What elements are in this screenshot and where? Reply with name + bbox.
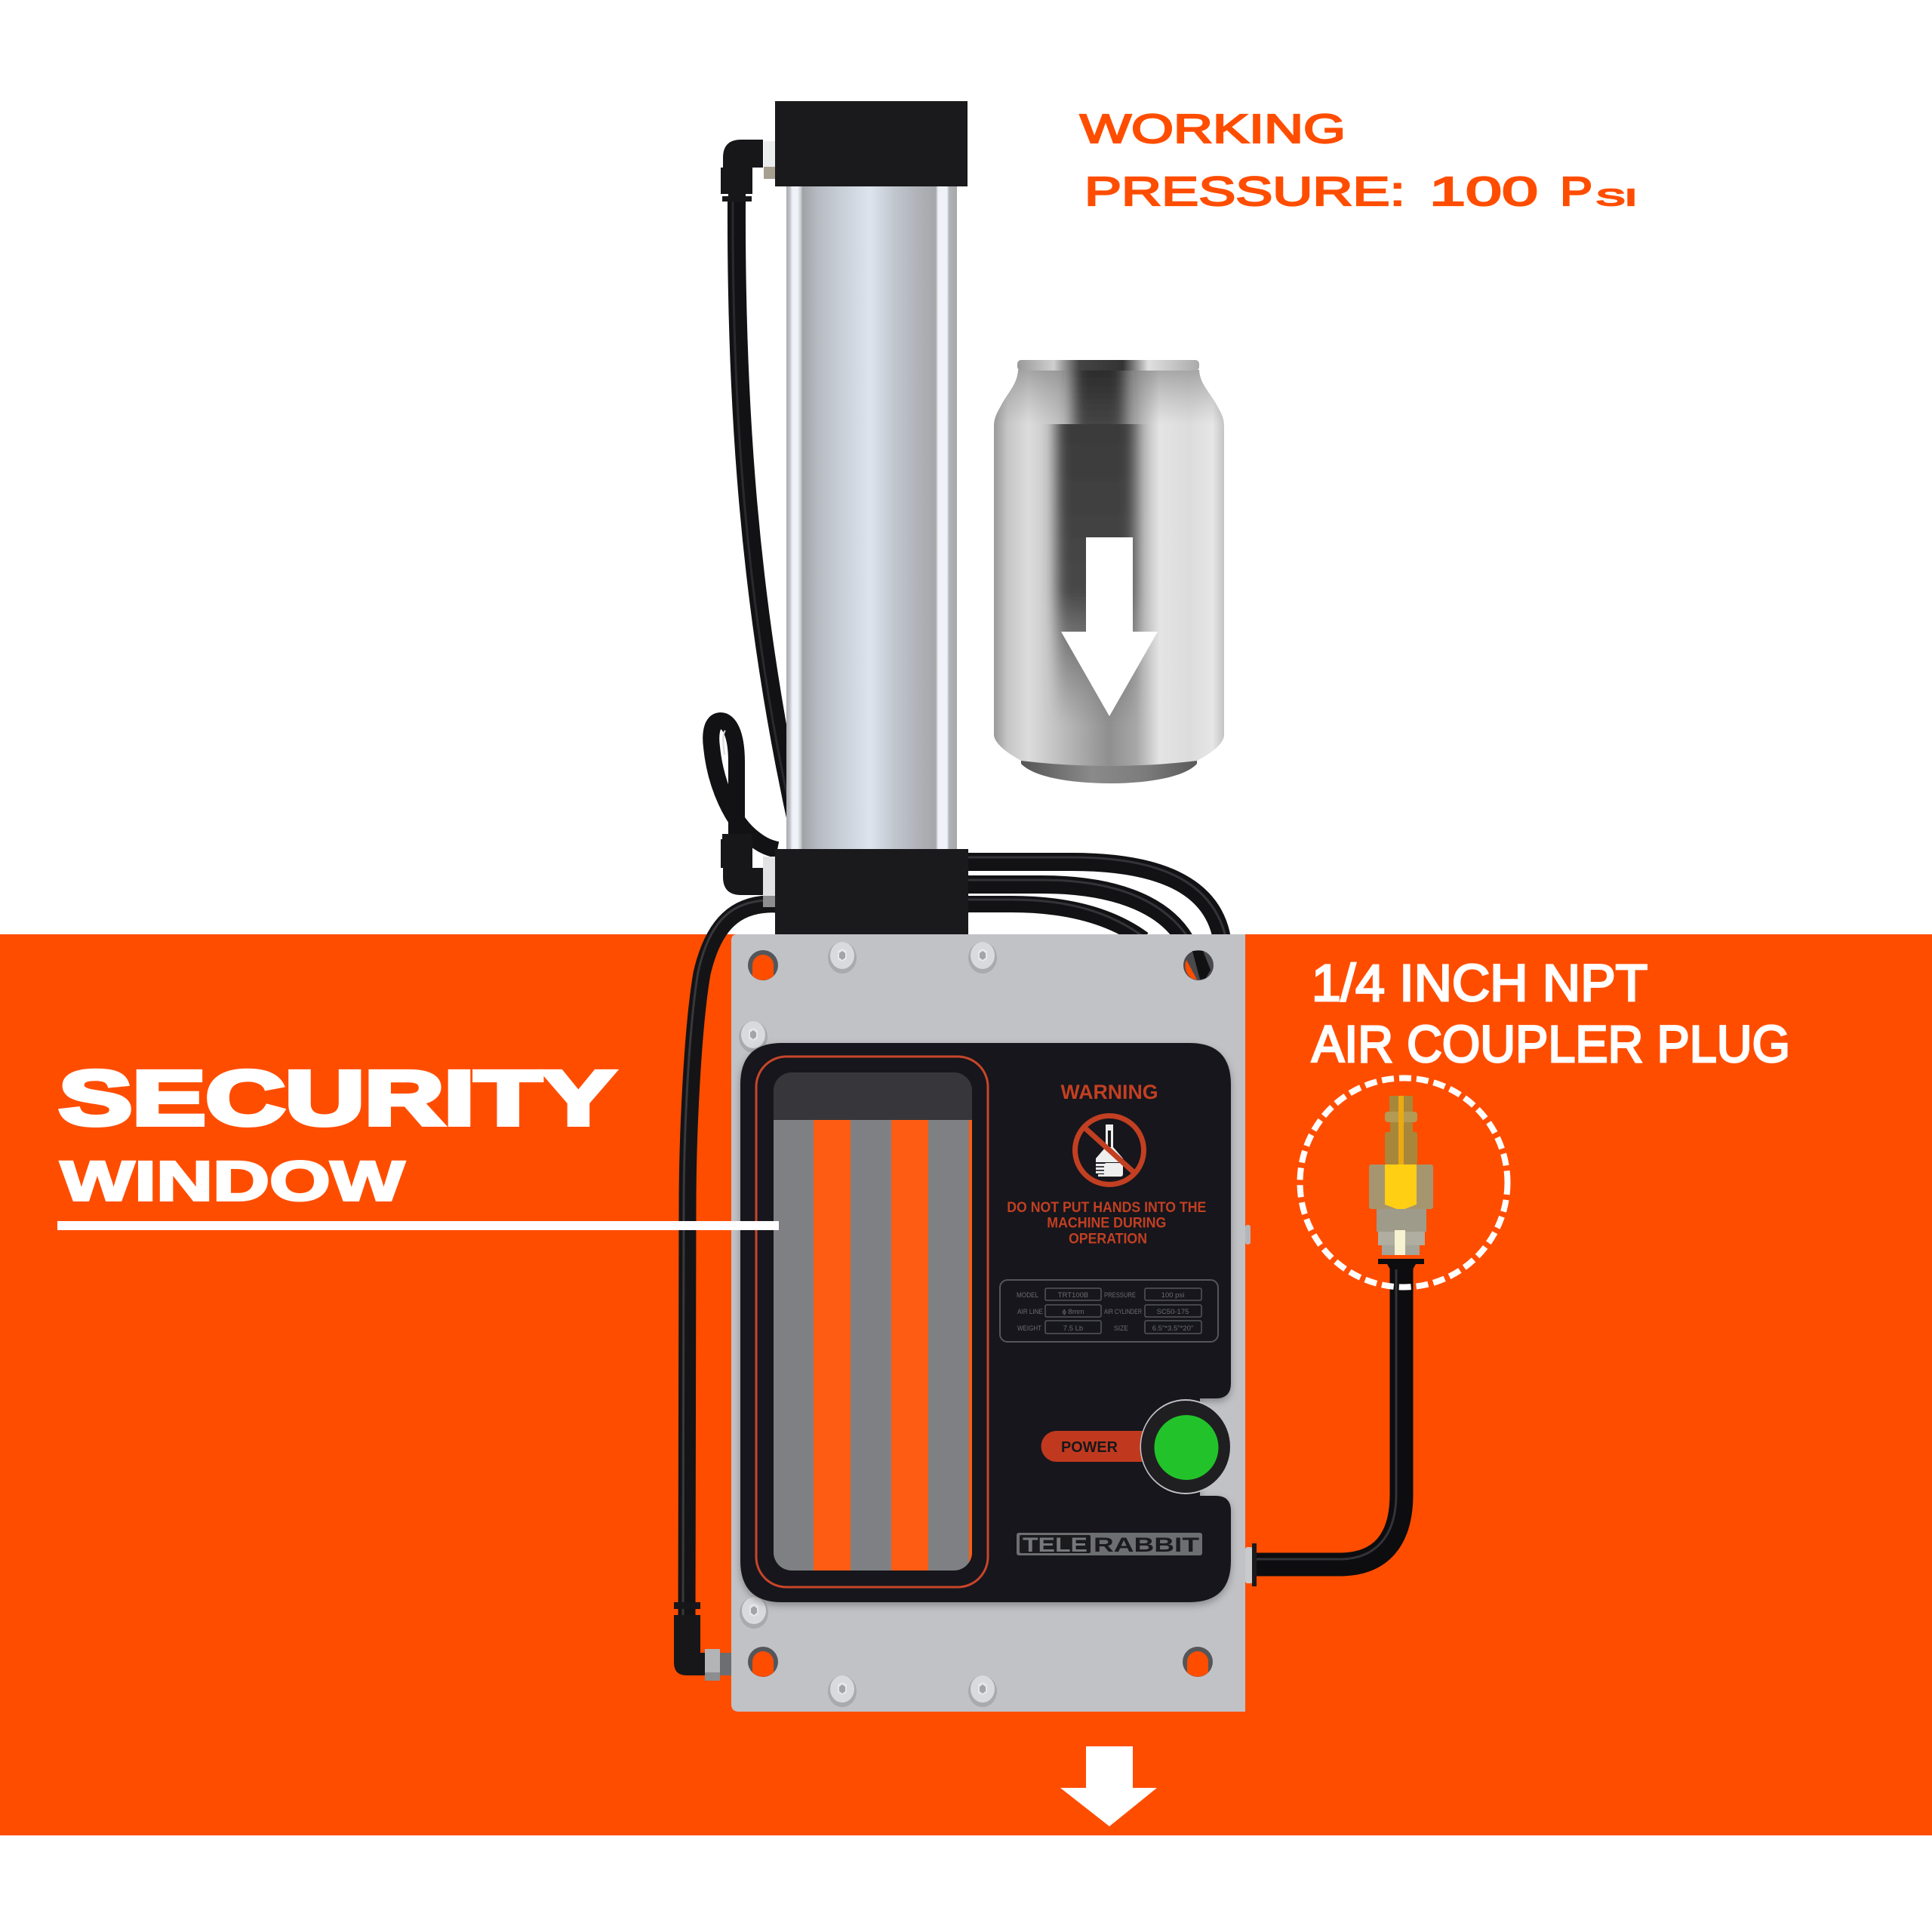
mounting plate [731,934,1245,1712]
working pressure text: WORKING [1080,106,1346,152]
security window heading: SECURITY [59,1055,615,1141]
power button [1140,1399,1232,1494]
pointer line [57,1221,779,1230]
mounting bolts [739,942,997,1707]
aluminium can [994,360,1224,783]
red window frame [756,1057,988,1587]
warning text: OPERATION [1069,1230,1147,1247]
specification table: SC50-175 [1157,1308,1189,1316]
coupler hose [1253,1260,1401,1564]
specification table: 6.5"*3.5"*20" [1152,1324,1193,1333]
specification table [1000,1280,1218,1342]
lower elbow fitting [721,834,775,907]
air cylinder tube [786,186,957,849]
bottom arrow [1060,1746,1157,1826]
working pressure text: 100 [1429,169,1538,214]
TeleRabbit logo: TELE [1023,1534,1088,1556]
specification table: 100 psi [1161,1291,1184,1300]
specification table: TRT100B [1058,1291,1088,1300]
specification table: AIR LINE [1017,1308,1043,1316]
specification table: SIZE [1114,1324,1128,1333]
working pressure text: P [1560,169,1592,214]
TeleRabbit logo [1017,1533,1202,1556]
specification table: 7.5 Lb [1063,1324,1083,1333]
security window heading: WINDOW [60,1150,405,1212]
coupler label: 1/4 INCH NPT [1312,954,1647,1012]
coupler label: AIR COUPLER PLUG [1312,1015,1790,1073]
cylinder top block [775,101,968,186]
long left hose [683,900,777,1619]
security window heading [59,1055,615,1212]
arrow on can [1061,537,1158,716]
cylinder bottom block [775,849,968,934]
side screw [1245,1225,1251,1244]
warning text: MACHINE DURING [1047,1215,1166,1232]
mounting holes [748,950,1214,1677]
working pressure text: SI [1596,184,1637,211]
top hoses [711,200,1227,943]
lower left elbow fitting [674,1602,731,1681]
security window [774,1072,972,1573]
TeleRabbit logo: RABBIT [1094,1534,1200,1556]
air coupler plug [1369,1096,1433,1269]
specification table: WEIGHT [1017,1324,1041,1333]
upper elbow fitting [721,140,775,202]
specification table: PRESSURE [1104,1291,1136,1300]
working pressure text: PRESSURE: [1084,169,1405,214]
warning title: WARNING [1061,1081,1158,1103]
specification table: AIR CYLINDER [1104,1308,1142,1316]
icon: no hands [1075,1115,1144,1185]
specification table: ϕ 8mm [1062,1308,1084,1316]
black control panel [740,1043,1232,1602]
dashed callout circle [1300,1078,1508,1287]
warning text: DO NOT PUT HANDS INTO THE [1007,1199,1206,1216]
specification table: MODEL [1017,1291,1038,1300]
coupler flange [1245,1543,1257,1586]
orange background band [0,934,1932,1835]
power label [1041,1431,1147,1462]
power label: POWER [1061,1439,1118,1456]
